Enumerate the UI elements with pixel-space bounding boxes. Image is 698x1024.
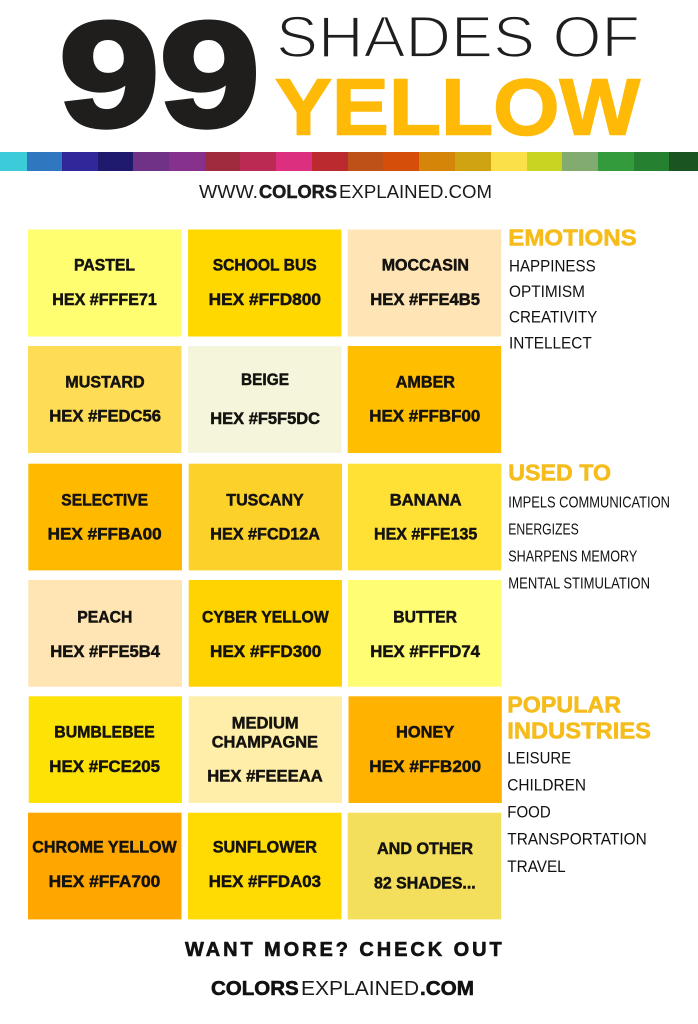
swatch: selective (28, 464, 182, 570)
heading: emotions: EMOTIONS (508, 225, 637, 251)
footer website (211, 978, 474, 1000)
footer website: .COM (420, 978, 474, 1000)
swatch: amber (348, 346, 501, 453)
swatch: cyber yellow: CYBER YELLOW (202, 607, 330, 626)
swatch: school bus (188, 230, 342, 336)
swatch: pastel (28, 230, 182, 336)
used to list (508, 494, 670, 593)
swatch: medium champagne: HEX #FEEEAA (207, 767, 323, 786)
swatch: amber: AMBER (396, 372, 455, 391)
swatch: peach: HEX #FFE5B4 (50, 642, 161, 661)
swatch: sunflower (188, 813, 342, 919)
swatch: medium champagne: MEDIUM (232, 713, 299, 732)
swatch: moccasin: HEX #FFE4B5 (370, 290, 480, 309)
swatch: bumblebee: HEX #FCE205 (49, 757, 160, 776)
swatch: banana (348, 464, 501, 570)
swatch: chrome yellow: HEX #FFA700 (49, 872, 160, 891)
swatch: cyber yellow: HEX #FFD300 (210, 642, 321, 661)
swatch: butter (348, 580, 501, 687)
swatch: honey (348, 696, 502, 803)
swatch: cyber yellow (189, 580, 342, 687)
heading: popular industries: INDUSTRIES (507, 717, 651, 743)
swatch: beige (188, 346, 342, 453)
emotions list: CREATIVITY (509, 309, 597, 327)
swatch: peach (28, 580, 182, 687)
swatch: school bus: HEX #FFD800 (209, 290, 321, 309)
swatch: pastel: PASTEL (74, 256, 135, 274)
swatch: tuscany (189, 464, 342, 570)
used to list: IMPELS COMMUNICATION (508, 494, 670, 511)
panel: popular industries (507, 692, 651, 876)
panel: used to (508, 459, 670, 593)
heading: popular industries: POPULAR (507, 692, 621, 718)
swatch: pastel: HEX #FFFE71 (52, 290, 157, 309)
swatch: beige: BEIGE (241, 370, 289, 389)
footer website: COLORS (211, 978, 299, 1000)
industries list: LEISURE (507, 749, 571, 767)
swatch: medium champagne: CHAMPAGNE (212, 733, 318, 752)
industries list: CHILDREN (507, 776, 586, 794)
swatch: tuscany: TUSCANY (226, 490, 304, 509)
swatch: beige: HEX #F5F5DC (210, 409, 320, 428)
website url: EXPLAINED.COM (339, 181, 492, 202)
swatch: school bus: SCHOOL BUS (213, 256, 317, 274)
swatch: and other shades (348, 813, 501, 919)
emotions list (509, 257, 597, 352)
heading: popular industries (507, 692, 651, 743)
heading: used to: USED TO (508, 459, 611, 485)
swatch: peach: PEACH (77, 607, 132, 626)
swatch: bumblebee (29, 696, 182, 803)
industries list: TRANSPORTATION (507, 830, 647, 848)
swatch: moccasin (348, 230, 501, 336)
title (59, 0, 641, 158)
emotions list: OPTIMISM (509, 283, 585, 301)
industries list (507, 749, 647, 876)
emotions list: HAPPINESS (509, 257, 596, 275)
swatch: amber: HEX #FFBF00 (369, 407, 480, 426)
swatch: chrome yellow: CHROME YELLOW (32, 838, 178, 857)
swatch: and other shades: AND OTHER (377, 839, 473, 858)
swatch: honey: HEX #FFB200 (369, 757, 481, 776)
swatch: mustard (28, 346, 182, 453)
swatch: butter: HEX #FFFD74 (370, 642, 481, 661)
swatch: mustard: HEX #FEDC56 (49, 407, 161, 426)
swatch: selective: SELECTIVE (61, 490, 148, 509)
panel: emotions (508, 225, 637, 352)
title line: shades of: SHADES OF (276, 5, 640, 70)
swatch: sunflower: HEX #FFDA03 (209, 872, 321, 891)
swatch: butter: BUTTER (393, 607, 457, 626)
used to list: SHARPENS MEMORY (508, 549, 637, 566)
swatch: selective: HEX #FFBA00 (48, 525, 162, 544)
swatch: banana: BANANA (390, 490, 462, 509)
colour spectrum band (0, 152, 698, 171)
swatch: bumblebee: BUMBLEBEE (54, 723, 155, 742)
title line: yellow: YELLOW (275, 62, 641, 152)
emotions list: INTELLECT (509, 334, 592, 352)
swatch: and other shades: 82 SHADES... (374, 873, 476, 892)
industries list: FOOD (507, 804, 551, 822)
swatch: honey: HONEY (396, 723, 455, 742)
used to list: MENTAL STIMULATION (508, 576, 650, 593)
swatch: chrome yellow (28, 813, 182, 919)
website url (199, 181, 492, 202)
swatch: moccasin: MOCCASIN (382, 256, 469, 274)
footer website: EXPLAINED (301, 978, 419, 1000)
swatch: mustard: MUSTARD (65, 372, 145, 391)
swatch: banana: HEX #FFE135 (374, 525, 477, 544)
footer call to action: WANT MORE? CHECK OUT (185, 939, 502, 961)
swatch: sunflower: SUNFLOWER (213, 838, 317, 857)
used to list: ENERGIZES (508, 521, 579, 538)
industries list: TRAVEL (507, 858, 566, 876)
website url: COLORS (259, 181, 337, 202)
swatch: tuscany: HEX #FCD12A (210, 525, 320, 544)
swatch: medium champagne (189, 696, 342, 803)
website url: WWW. (199, 181, 258, 202)
